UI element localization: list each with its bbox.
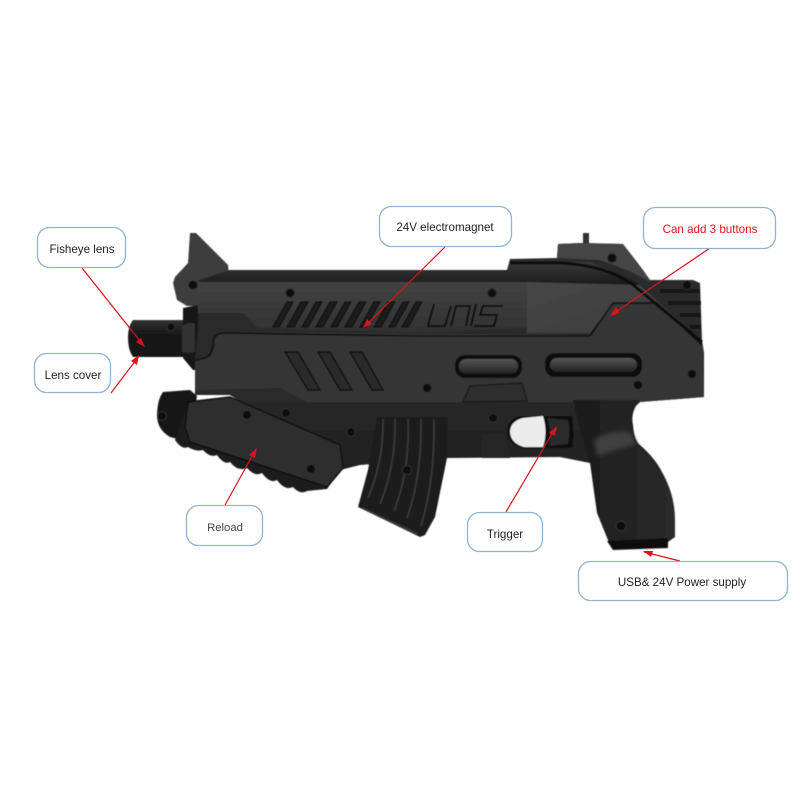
pill slide buttons [455,353,642,378]
label: fisheye lens: Fisheye lens [49,243,115,256]
handguard front cap [157,390,197,442]
label: lens cover: Lens cover [45,369,101,382]
label: USB power supply [578,562,788,600]
label: fisheye lens [38,228,126,268]
rear sight post [583,233,589,245]
arrow: trigger [506,426,557,512]
label: lens cover [34,354,110,392]
arrow: add buttons [610,248,710,316]
pistol grip [573,400,675,545]
label: can add 3 buttons [644,208,776,248]
label: 24V electromagnet: 24V electromagnet [396,221,494,234]
screws [158,254,696,531]
upper logo panel [198,282,527,332]
handguard teeth [175,400,340,492]
arrow: fisheye lens [82,268,145,347]
label boxes [34,206,788,600]
handguard panel [185,397,343,487]
collar nut [182,323,195,353]
label: trigger: Trigger [487,528,523,541]
small hump above trigger [463,383,527,402]
rear cooling fins [660,289,701,329]
label: USB power supply: USB& 24V Power supply [618,576,746,589]
top rail band [198,262,650,293]
rear sight block [557,243,650,282]
label: 24V electromagnet [380,206,512,246]
arrow: power supply [643,551,680,561]
vent slots [273,302,422,327]
trigger [547,418,570,446]
lower frame [195,380,640,470]
label: reload: Reload [207,522,243,534]
label: can add 3 buttons: Can add 3 buttons [663,223,758,236]
gun [128,233,704,550]
angled side slots [285,352,383,390]
arrow: electromagnet [363,247,445,328]
grip base cap [607,538,668,550]
trigger guard contour [482,434,510,458]
rear cheek panel [195,304,704,402]
front sight [173,233,230,306]
main receiver [195,243,704,402]
rear lighter panel [527,282,702,342]
panel contour lines [195,303,702,360]
guard window [510,416,546,447]
barrel collar [183,305,200,370]
arrow: reload [225,448,257,505]
arrow: lens cover [111,355,139,393]
uris logo [428,304,503,326]
label: reload [186,506,262,546]
arrows [82,247,710,561]
label: trigger [468,512,542,552]
trigger guard opening [507,416,574,448]
grip thumb shelf highlight [594,432,636,456]
lens barrel [128,320,184,357]
rear dark curved seam [510,263,702,342]
magazine ribs [362,419,434,534]
magazine [358,417,448,537]
